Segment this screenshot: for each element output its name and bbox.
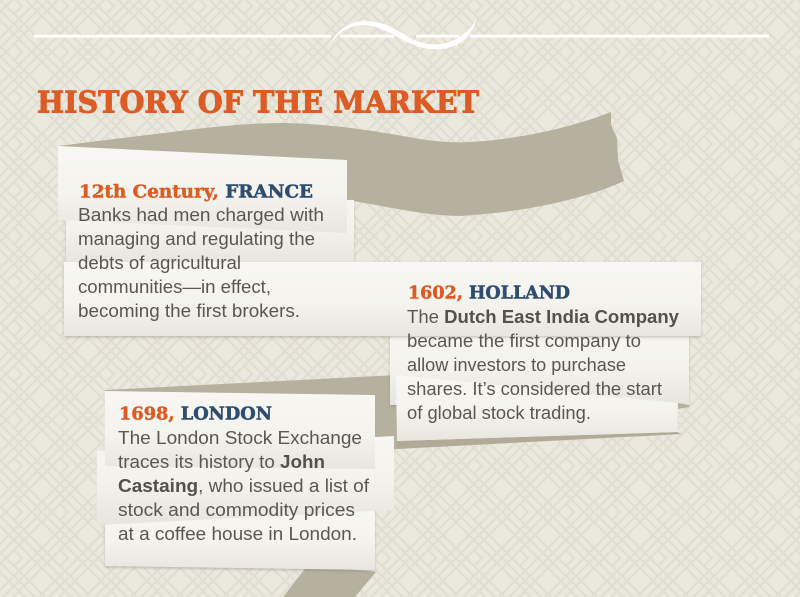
text block: London body: The London Stock Exchange <box>118 428 362 448</box>
panel: 1602 Holland lower strips <box>390 330 689 449</box>
text block: London body: at a coffee house in London. <box>118 524 357 544</box>
text block: Holland body: became the first company to <box>407 331 641 351</box>
text block: London body: traces its history to John <box>118 452 325 472</box>
text block: London body: Castaing, who issued a list of <box>118 476 370 496</box>
text block: France body: debts of agricultural <box>78 253 241 273</box>
text block: Holland body: of global stock trading. <box>407 403 591 423</box>
text block: London body: stock and commodity prices <box>118 500 355 520</box>
text block: Holland body: allow investors to purchase <box>407 355 626 375</box>
text block: Holland body: The Dutch East India Company <box>407 307 679 327</box>
ribbon: top band <box>58 112 624 220</box>
panel: 12th century France <box>58 146 354 262</box>
ribbon: middle band <box>105 375 398 480</box>
text block: London body <box>118 428 370 544</box>
text block: France body: managing and regulating the <box>78 229 315 249</box>
text block: France body: communities—in effect, <box>78 277 271 297</box>
heading: Holland: 1602, HOLLAND <box>408 284 570 304</box>
text block: Holland body: shares. It’s considered the start <box>407 379 662 399</box>
panel: shared wide strip <box>64 262 701 336</box>
text block: France body: Banks had men charged with <box>78 205 324 225</box>
text block: Holland body <box>407 307 679 423</box>
text block: France body: becoming the first brokers. <box>78 301 300 321</box>
panel: 1698 London <box>97 391 394 570</box>
top divider with swoosh <box>34 17 769 49</box>
paper strips: London <box>97 391 394 570</box>
title: HISTORY OF THE MARKET <box>37 86 480 120</box>
ribbon: bottom band <box>283 565 376 597</box>
heading: France: 12th Century, FRANCE <box>79 182 313 202</box>
heading: London: 1698, LONDON <box>119 404 272 424</box>
paper strips: France <box>58 146 354 262</box>
text block: France body <box>78 205 324 321</box>
